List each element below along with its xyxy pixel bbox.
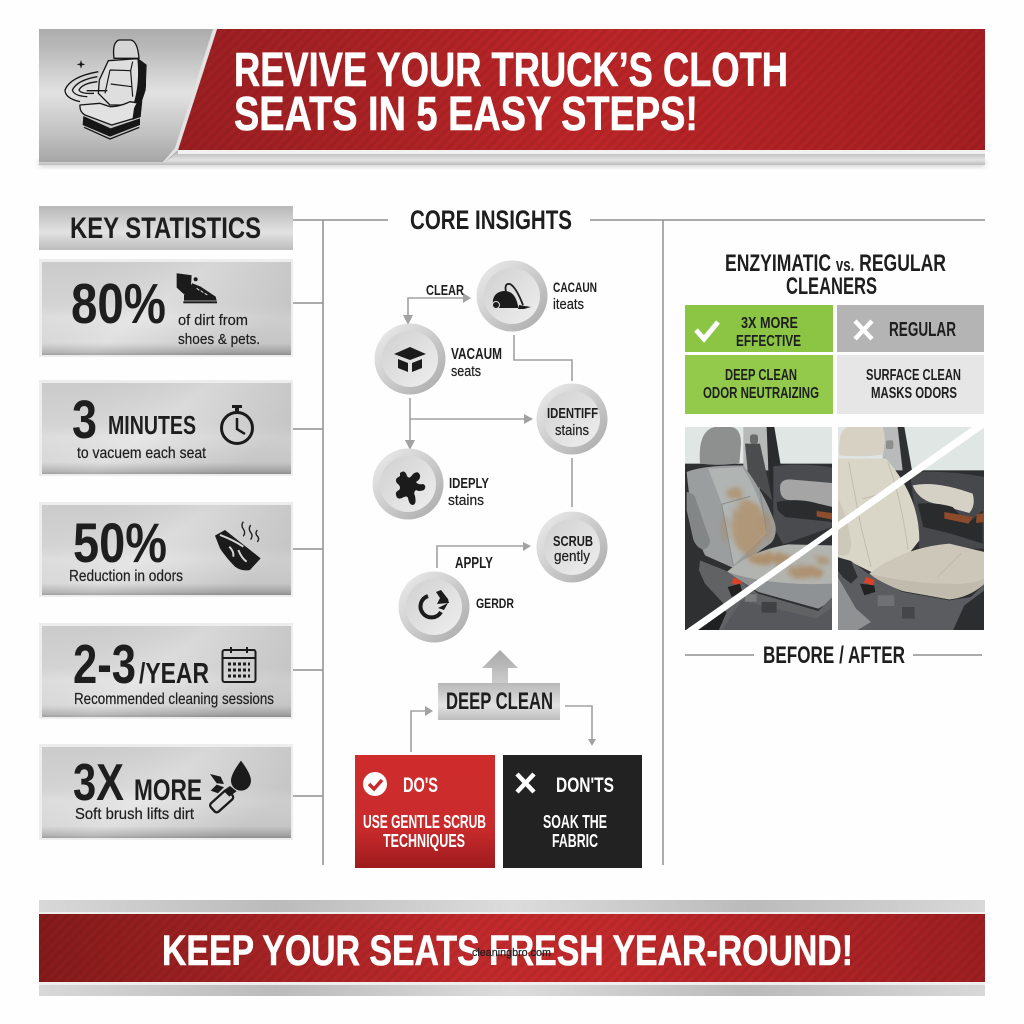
step: scrub circle: SCRUB — [553, 533, 593, 550]
icon: vacuum — [492, 284, 531, 309]
heading: enzymatic vs regular: CLEANERS — [786, 273, 877, 300]
panel: don'ts: FABRIC — [552, 831, 598, 851]
icon: calendar — [222, 647, 256, 682]
icon: stopwatch — [222, 405, 252, 444]
comparison table: regular: MASKS ODORS — [871, 385, 957, 402]
footer banner — [39, 900, 985, 996]
comparison table: regular: SURFACE CLEAN — [866, 367, 961, 384]
icon: cross — [855, 321, 872, 339]
comparison table: enzymatic — [685, 305, 833, 414]
caption: before / after: BEFORE / AFTER — [763, 642, 905, 669]
title — [234, 44, 788, 141]
panel: do's: USE GENTLE SCRUB — [363, 812, 486, 832]
panel: key statistics heading: KEY STATISTICS — [70, 212, 261, 245]
arrow: up arrow — [482, 650, 518, 684]
step: vacuum icon circle: CACAUN — [553, 279, 597, 295]
icon: applicator — [421, 596, 441, 617]
comparison table: enzymatic: EFFECTIVE — [736, 333, 801, 350]
icon: splat — [396, 472, 425, 505]
photo: clean seat after — [836, 427, 986, 631]
panel: don'ts: SOAK THE — [543, 812, 607, 832]
panel: stat 80%: shoes & pets. — [178, 331, 260, 348]
step: box icon circle — [374, 324, 502, 394]
step: identify circle — [536, 384, 608, 454]
header banner — [39, 29, 985, 167]
heading: enzymatic vs regular — [725, 250, 946, 300]
panel: do's: TECHNIQUES — [383, 831, 465, 851]
panel: do's: DO'S — [403, 774, 438, 797]
comparison table: enzymatic: DEEP CLEAN — [725, 367, 797, 384]
panel: stat 3X more: MORE — [134, 774, 202, 807]
connector lines — [293, 220, 985, 865]
panel: stat 50%: 50% — [73, 511, 167, 574]
box: deep clean: DEEP CLEAN — [446, 688, 553, 715]
title: SEATS IN 5 EASY STEPS! — [234, 88, 698, 141]
panel: stat 80% — [39, 259, 293, 357]
heading: core insights: CORE INSIGHTS — [410, 205, 572, 235]
panel: key statistics heading — [39, 206, 293, 250]
step: vacuum icon circle: iteats — [553, 296, 584, 313]
icon: car seat with sparkle — [65, 40, 146, 139]
connector arrows around deep clean — [411, 706, 596, 752]
footer banner: KEEP YOUR SEATS FRESH YEAR-ROUND! — [162, 927, 853, 975]
panel: stat 80%: of dirt from — [178, 312, 248, 329]
step: stain icon circle: stains — [448, 492, 484, 509]
panel: stat 3 minutes: 3 — [72, 390, 97, 450]
panel: stat 2-3 per year: Recommended cleaning sessions — [74, 691, 274, 708]
panel: stat 2-3 per year: /YEAR — [139, 658, 209, 690]
comparison table: enzymatic: ODOR NEUTRAIZING — [703, 385, 819, 402]
step: box icon circle: seats — [451, 363, 481, 380]
flow arrows — [403, 293, 572, 568]
icon: boot — [177, 273, 217, 303]
panel: stat 80%: 80% — [71, 272, 166, 336]
panel: stat 50% — [39, 502, 293, 597]
photo divider slash — [686, 427, 985, 630]
step: vacuum icon circle — [476, 260, 597, 332]
step: spray icon circle: GERDR — [476, 595, 514, 611]
step: stain icon circle — [372, 448, 489, 520]
heading: enzymatic vs regular: ENZYIMATIC vs. REGULAR — [725, 250, 946, 277]
panel: stat 2-3 per year: 2-3 — [73, 633, 136, 695]
panel: stat 3 minutes: MINUTES — [108, 410, 196, 440]
icon: cross — [517, 774, 534, 792]
panel: do's — [355, 755, 495, 868]
panel: stat 3X more: Soft brush lifts dirt — [75, 806, 195, 823]
icon: box — [394, 347, 426, 372]
step: stain icon circle: IDEPLY — [449, 475, 489, 492]
box: deep clean — [438, 683, 560, 720]
panel: stat 3 minutes: to vacuem each seat — [77, 445, 206, 462]
icon: check circle — [363, 772, 387, 796]
icon: odor fabric — [215, 522, 261, 570]
panel: stat 3X more — [39, 744, 293, 840]
panel: stat 3 minutes — [39, 380, 293, 476]
step: spray icon circle — [398, 572, 514, 642]
step: identify circle: stains — [555, 422, 589, 439]
panel: don'ts: DON'TS — [556, 774, 614, 797]
label: apply: APPLY — [455, 555, 493, 572]
panel: stat 50%: Reduction in odors — [69, 568, 183, 585]
step: scrub circle: gently — [554, 548, 590, 565]
comparison table: regular: REGULAR — [889, 319, 956, 341]
label: clear: CLEAR — [426, 282, 464, 299]
step: box icon circle: VACAUM — [451, 346, 502, 363]
icon: brush and drop — [209, 761, 251, 814]
panel: stat 2-3 per year — [39, 623, 293, 719]
icon: check — [696, 322, 718, 339]
step: identify circle: IDENTIFF — [547, 405, 598, 422]
step: scrub circle — [536, 512, 608, 582]
title: REVIVE YOUR TRUCK’S CLOTH — [234, 44, 788, 97]
photo: dirty seat before — [685, 427, 835, 631]
panel: don'ts — [503, 755, 642, 868]
comparison table: regular — [837, 305, 984, 414]
comparison table: enzymatic: 3X MORE — [741, 315, 798, 332]
panel: stat 3X more: 3X — [73, 754, 124, 812]
footer banner: cleaningbro.com — [472, 947, 551, 959]
